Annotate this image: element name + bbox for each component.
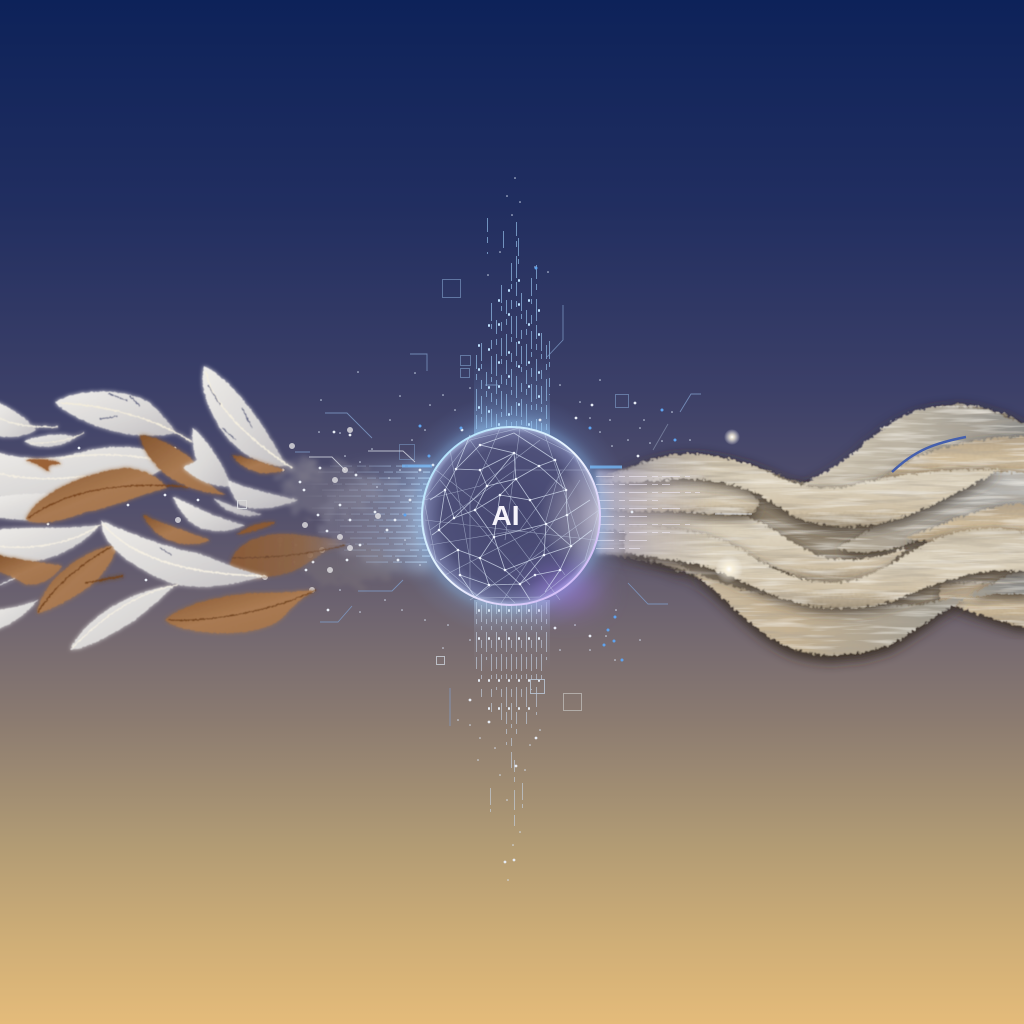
data column below sphere xyxy=(474,600,550,826)
particles: small xyxy=(319,178,690,880)
fur strand: top back xyxy=(780,406,1024,495)
feather: brown small right xyxy=(236,522,275,535)
circuit traces and outlined squares xyxy=(238,280,752,726)
feather: brown bottom xyxy=(165,590,316,633)
feather: white left middle xyxy=(0,525,100,562)
fur strand: right tan xyxy=(905,503,1024,545)
feather: white mid small xyxy=(173,497,262,531)
background glow behind sphere xyxy=(389,394,633,638)
fur strand: upper main xyxy=(600,454,1000,526)
purple glow lower right xyxy=(529,570,601,610)
feather: white fan xyxy=(0,447,172,520)
icon: blue sliver between strands xyxy=(892,437,966,472)
network lines fine xyxy=(424,428,599,605)
particles: blue xyxy=(405,268,675,660)
feather: brown fleck xyxy=(25,459,62,472)
dissolving feather haze xyxy=(278,458,430,585)
label: AI: AI xyxy=(492,500,520,531)
feather: brown under top feather xyxy=(232,455,285,473)
data column above sphere xyxy=(474,218,550,440)
sphere rim xyxy=(422,427,600,605)
network nodes xyxy=(439,445,571,585)
particles: large soft xyxy=(178,430,378,590)
feather: brown upper middle xyxy=(140,435,226,495)
fur strand: bottom silhouette xyxy=(625,545,1024,655)
particles: medium xyxy=(48,403,638,862)
network lines xyxy=(430,433,592,600)
feather: brown fading xyxy=(230,534,348,577)
sphere with network mesh xyxy=(420,425,602,610)
fur base silhouette xyxy=(600,404,1024,656)
feather: brown large xyxy=(26,468,188,523)
sparkle: upper right xyxy=(724,429,740,445)
fur strand: upper tan xyxy=(880,436,1024,484)
fur strand: middle xyxy=(600,505,905,583)
feather: white dissolving right xyxy=(228,480,298,508)
sphere body xyxy=(422,427,600,605)
fur strand: lower right xyxy=(940,583,1024,628)
fur strand: right grey xyxy=(838,472,1024,552)
fur strands on the right xyxy=(600,404,1024,656)
data stream: horizontal lines left xyxy=(300,462,432,572)
feather: white upper middle xyxy=(183,428,231,486)
feather: white big center xyxy=(101,521,267,587)
feather: white small xyxy=(24,433,84,447)
feather: white top xyxy=(55,392,192,442)
feather: white far left top xyxy=(0,402,58,437)
feathers on the left xyxy=(0,366,348,650)
data stream: horizontal lines right xyxy=(590,467,700,548)
sphere outer glow xyxy=(420,425,602,607)
sparkle: on fur xyxy=(715,555,743,583)
feather: brown lower left xyxy=(37,545,123,613)
feather: white lower xyxy=(70,585,178,650)
fur strand: second xyxy=(600,475,758,514)
feather: brown mid small xyxy=(143,515,210,544)
feather: white far left lower xyxy=(0,578,38,630)
fur strand: lower main xyxy=(625,526,1024,608)
fur to data transition haze xyxy=(596,470,716,554)
fur haze inside sphere xyxy=(542,465,599,566)
feather: white large top xyxy=(203,366,292,468)
feather: brown left xyxy=(0,555,62,584)
